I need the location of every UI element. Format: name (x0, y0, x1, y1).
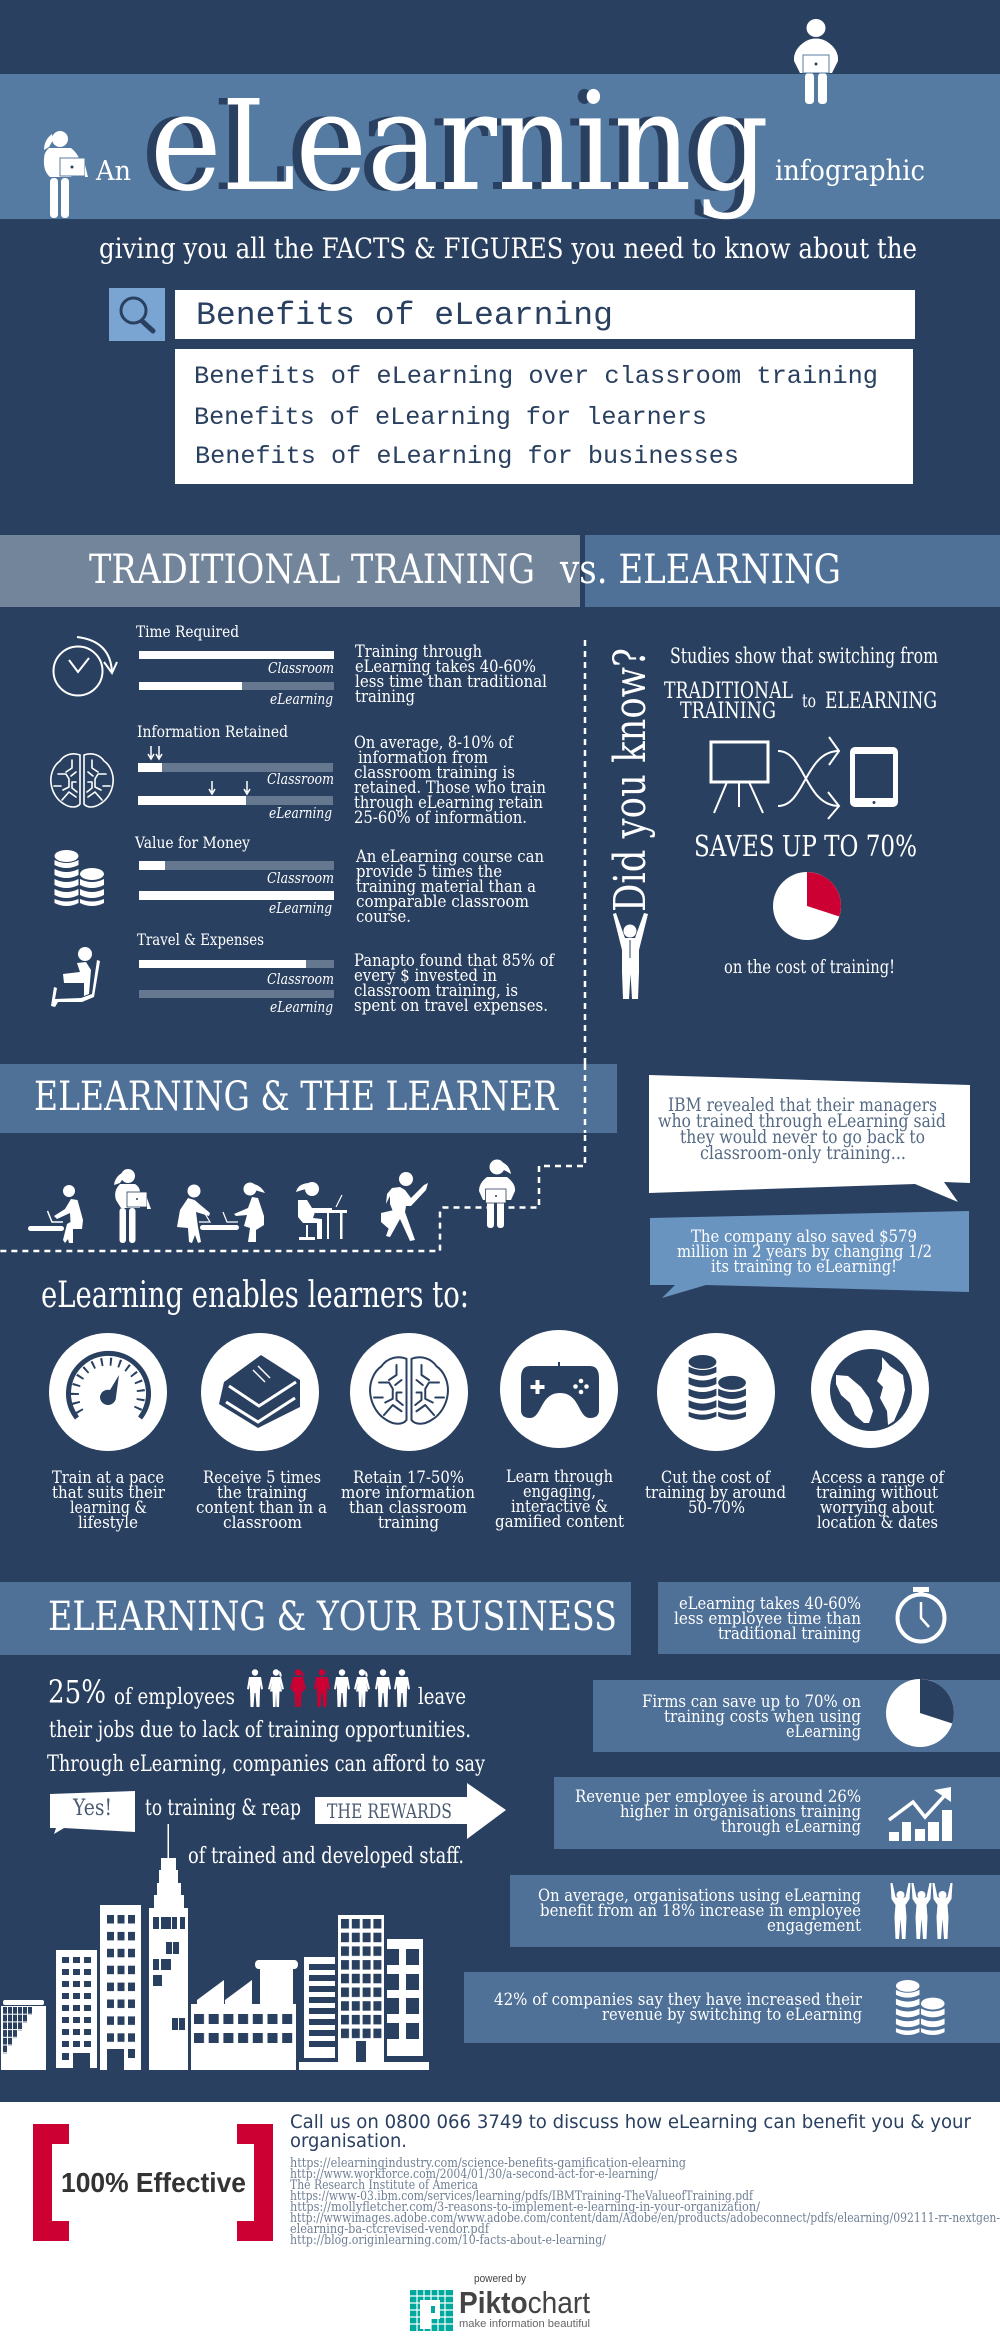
building: right block group (299, 1915, 429, 2070)
search suggestions (175, 349, 913, 484)
did you know text: studies: TRAINING (680, 699, 776, 724)
text: travel and expenses: Panapto found that 85% of (354, 951, 556, 970)
statement: 25 percent of employees: their jobs due to lack of training opportunities. (49, 1718, 471, 1743)
powered by Piktochart: Piktochart (459, 2285, 590, 2320)
heading: elearning and your business (0, 1582, 631, 1655)
fact: training costs: eLearning (786, 1722, 861, 1741)
powered by Piktochart (410, 2273, 590, 2331)
icon: magnifying glass (109, 288, 165, 341)
call to action (290, 2111, 971, 2152)
search box (175, 290, 915, 339)
benefit: pace (49, 1333, 167, 1532)
icon: brain (350, 1333, 468, 1451)
fact: training costs: training costs when using (664, 1707, 861, 1726)
text: information retained: retained. Those who train (354, 778, 546, 797)
fact: increased revenue: revenue by switching to eLearning (602, 2005, 862, 2024)
text: travel and expenses: every $ invested in (354, 966, 497, 985)
figure: woman with laptop front (479, 1160, 515, 1228)
comparison: information retained (51, 722, 546, 827)
did you know text: studies (664, 644, 938, 724)
references: https://elearningindustry.com/science-benefits-gamification-elearning (290, 2156, 686, 2171)
benefit: access: training without (816, 1483, 938, 1502)
speech bubble: yes: Yes! (72, 1796, 112, 1821)
powered by Piktochart: make information beautiful (459, 2318, 590, 2330)
search suggestions: Benefits of eLearning over classroom training (194, 362, 878, 391)
text: trained and developed staff: of trained and developed staff. (188, 1844, 464, 1869)
heading: elearning and your business: ELEARNING & YOUR BUSINESS (48, 1594, 617, 1640)
icon: presentation board (711, 742, 768, 813)
figures: learners (28, 1160, 515, 1243)
icon: speedometer (49, 1333, 167, 1451)
references: The Research Institute of America (290, 2178, 478, 2193)
benefit: retain (341, 1333, 475, 1532)
benefit: cost: 50-70% (688, 1498, 745, 1517)
fact: revenue per employee: Revenue per employee is around 26% (575, 1787, 861, 1806)
title banner: infographic (775, 154, 925, 187)
icon: coins (657, 1333, 775, 1451)
speech bubble: IBM: IBM revealed that their managers (668, 1095, 937, 1116)
references (290, 2156, 1000, 2248)
text: information retained: On average, 8-10% of (354, 733, 515, 752)
text: information retained: information from (358, 748, 488, 767)
fact: revenue per employee: higher in organisations training (620, 1802, 861, 1821)
fact: engagement (510, 1875, 1000, 1947)
fact: engagement: On average, organisations using eLearning (538, 1886, 861, 1905)
dashed path (0, 640, 585, 1251)
figure: woman at desk (296, 1182, 347, 1240)
did you know text: studies: TRADITIONAL (664, 679, 793, 704)
right bracket (237, 2124, 273, 2241)
search box: Benefits of eLearning (196, 297, 613, 334)
benefit: content: content than in a (196, 1498, 327, 1517)
subheading: enables learners to: eLearning enables learners to: (41, 1275, 469, 1316)
text: value for money: comparable classroom (356, 892, 529, 911)
figure: two people at table (177, 1182, 265, 1243)
fact: training costs: Firms can save up to 70% on (642, 1692, 861, 1711)
figure: sitting at table (28, 1185, 83, 1243)
speech bubble: company saved: its training to eLearning! (711, 1257, 897, 1277)
left bracket (33, 2124, 69, 2241)
icon: cheering people (890, 1883, 952, 1939)
text: time required: less time than traditional (355, 672, 547, 691)
icon: shuffle arrows (778, 737, 839, 819)
benefit: engaging: interactive & (511, 1497, 608, 1516)
benefit: engaging: gamified content (495, 1512, 624, 1531)
search suggestions: Benefits of eLearning for learners (194, 403, 707, 432)
text: time required (355, 642, 547, 706)
icon: game controller (500, 1330, 618, 1448)
icon: brain (51, 754, 113, 807)
fact: engagement: engagement (767, 1916, 861, 1935)
icon: seated traveller (51, 947, 100, 1007)
title banner: eLearning (150, 64, 769, 222)
title banner: eLearning (141, 64, 760, 222)
call to action: Call us on 0800 066 3749 to discuss how eLearning can benefit you & your (290, 2111, 971, 2133)
comparison: travel and expenses (51, 930, 556, 1016)
references: http://www.workforce.com/2004/01/30/a-second-act-for-e-learning/ (290, 2167, 659, 2182)
benefit: access: location & dates (817, 1513, 938, 1532)
speech bubble: company saved: million in 2 years by changing 1/2 (677, 1242, 932, 1262)
comparison: travel and expenses: eLearning (270, 998, 333, 1016)
references: https://mollyfletcher.com/3-reasons-to-implement-e-learning-in-your-organization/ (290, 2200, 761, 2215)
statement: 25 percent of employees: 25% (48, 1673, 106, 1711)
text: information retained (354, 733, 546, 827)
benefit: engaging (495, 1330, 624, 1531)
comparison: travel and expenses: Classroom (267, 970, 334, 988)
building: small left (1, 2000, 46, 2070)
building: mid left (56, 1950, 97, 2068)
pie chart: 30 percent red (773, 872, 841, 940)
benefit: access: Access a range of (810, 1468, 946, 1487)
fact: increased revenue: 42% of companies say they have increased their (494, 1990, 862, 2009)
benefit: retain: training (378, 1513, 439, 1532)
powered by Piktochart: powered by (474, 2273, 526, 2285)
pie chart: 70 percent saving (886, 1679, 954, 1747)
benefit: pace: lifestyle (78, 1513, 138, 1532)
icon: tablet (850, 747, 898, 807)
comparison: value for money: Classroom (267, 869, 334, 887)
arrow: the rewards: THE REWARDS (327, 1799, 452, 1823)
text: value for money: provide 5 times the (356, 862, 502, 881)
comparison: information retained: Classroom (267, 770, 334, 788)
title banner (0, 64, 1000, 222)
heading: traditional training vs elearning (0, 535, 1000, 607)
footer background (0, 2102, 1000, 2343)
benefit: content: classroom (223, 1513, 302, 1532)
text: travel and expenses: spent on travel expenses. (354, 996, 548, 1015)
comparison: time required (54, 622, 547, 708)
figure: woman carrying laptop (114, 1169, 151, 1243)
icon: stopwatch (898, 1590, 944, 1642)
icon: coins (896, 1980, 945, 2035)
text: information retained: classroom training is (354, 763, 515, 782)
title banner: An (95, 156, 131, 187)
did you know text: studies: ELEARNING (825, 689, 937, 714)
on the cost of training: on the cost of training! (724, 957, 895, 978)
statement: 25 percent of employees: Through eLearning, companies can afford to say (47, 1752, 485, 1777)
text: travel and expenses: classroom training, is (354, 981, 518, 1000)
benefit: retain: more information (341, 1483, 475, 1502)
icon: clock (54, 637, 117, 696)
fact: employee time: eLearning takes 40-60% (679, 1594, 861, 1613)
heading: elearning and the learner: ELEARNING & THE LEARNER (34, 1074, 560, 1120)
building: factory (191, 1960, 298, 2070)
benefit: content: the training (217, 1483, 307, 1502)
benefit: access: worrying about (820, 1498, 934, 1517)
comparison: time required: Classroom (268, 659, 334, 677)
fact: revenue per employee: through eLearning (721, 1817, 861, 1836)
statement: 25 percent of employees: of employees (114, 1685, 235, 1710)
text: value for money: course. (356, 907, 411, 926)
text: time required: training (355, 687, 415, 706)
text: time required: eLearning takes 40-60% (355, 657, 536, 676)
comparison: time required: eLearning (270, 690, 333, 708)
speech bubble: IBM: they would never to go back to (680, 1127, 925, 1148)
comparison: time required: Time Required (136, 622, 239, 641)
fact: engagement: benefit from an 18% increase in employee (540, 1901, 861, 1920)
icon: growth chart (889, 1787, 952, 1841)
effective logo: 100% Effective (61, 2167, 246, 2198)
benefit: cost: Cut the cost of (661, 1468, 772, 1487)
icon: man holding text (613, 913, 648, 999)
benefit: retain: Retain 17-50% (353, 1468, 464, 1487)
comparison: value for money (54, 833, 544, 926)
text: value for money: training material than a (356, 877, 536, 896)
fact: revenue per employee (554, 1777, 1000, 1849)
comparison: information retained: eLearning (269, 804, 332, 822)
benefit: pace: learning & (70, 1498, 147, 1517)
benefit: content: Receive 5 times (203, 1468, 321, 1487)
statement: 25 percent of employees (47, 1669, 485, 1777)
comparison: value for money: eLearning (269, 899, 332, 917)
benefit: retain: than classroom (349, 1498, 467, 1517)
benefit: cost: training by around (645, 1483, 786, 1502)
comparison: travel and expenses: Travel & Expenses (137, 930, 264, 949)
logo mark (410, 2290, 453, 2331)
benefit: content (196, 1333, 327, 1532)
statement: 25 percent of employees: leave (418, 1685, 466, 1710)
comparison: information retained: Information Retained (137, 722, 288, 741)
fact: employee time: traditional training (718, 1624, 861, 1643)
icon: coins (54, 850, 104, 906)
text: information retained: 25-60% of information. (354, 808, 527, 827)
figure: walking with bag (381, 1172, 428, 1241)
call to action: organisation. (290, 2130, 407, 2152)
icon: man with laptop (794, 19, 838, 104)
speech bubble: company saved: The company also saved $579 (691, 1227, 917, 1247)
fact: employee time (658, 1582, 1000, 1654)
speech bubble: IBM (649, 1075, 970, 1202)
did you know text: studies: to (802, 690, 816, 712)
text: information retained: through eLearning retain (354, 793, 543, 812)
fact: employee time: less employee time than (674, 1609, 861, 1628)
text: time required: Training through (355, 642, 482, 661)
benefit: pace: that suits their (52, 1483, 165, 1502)
arrow: the rewards (315, 1783, 506, 1839)
heading: traditional training vs elearning: vs. ELEARNING (559, 547, 841, 593)
benefit: engaging: engaging, (523, 1482, 596, 1501)
speech bubble: IBM: classroom-only training... (700, 1143, 906, 1164)
fact: training costs (593, 1679, 1000, 1752)
heading: traditional training vs elearning: TRADITIONAL TRAINING (89, 547, 535, 593)
speech bubble: company saved (650, 1211, 969, 1298)
text: travel and expenses (354, 951, 556, 1015)
text: value for money (355, 847, 544, 926)
effective logo (33, 2124, 273, 2241)
did you know heading: Did you know? (605, 648, 656, 912)
icon row: eight people, two red (247, 1669, 410, 1707)
references: http://blog.originlearning.com/10-facts-about-e-learning/ (290, 2233, 607, 2248)
text: to training and reap: to training & reap (145, 1796, 301, 1821)
benefit: engaging: Learn through (506, 1467, 613, 1486)
references: https://www-03.ibm.com/services/learning/pdfs/IBMTraining-TheValueofTraining.pdf (290, 2189, 754, 2204)
fact: increased revenue (464, 1972, 1000, 2043)
search suggestions: Benefits of eLearning for businesses (195, 442, 739, 471)
building: tall left (100, 1905, 141, 2070)
saves up to 70 percent: SAVES UP TO 70% (694, 829, 917, 863)
references: elearning-ba-ctcrevised-vendor.pdf (290, 2222, 490, 2237)
comparison: value for money: Value for Money (134, 833, 250, 852)
city skyline (1, 1824, 429, 2070)
benefit: access (810, 1330, 946, 1532)
icon: books (201, 1333, 319, 1451)
benefit: pace: Train at a pace (52, 1468, 164, 1487)
icon: woman with laptop (44, 131, 88, 218)
heading: elearning and the learner (0, 1064, 617, 1133)
text: value for money: An eLearning course can (355, 847, 544, 866)
benefit: cost (645, 1333, 786, 1517)
speech bubble: IBM: who trained through eLearning said (658, 1111, 946, 1132)
icon: globe (811, 1330, 929, 1448)
speech bubble: yes (50, 1791, 135, 1834)
building: spire tower (149, 1824, 188, 2070)
